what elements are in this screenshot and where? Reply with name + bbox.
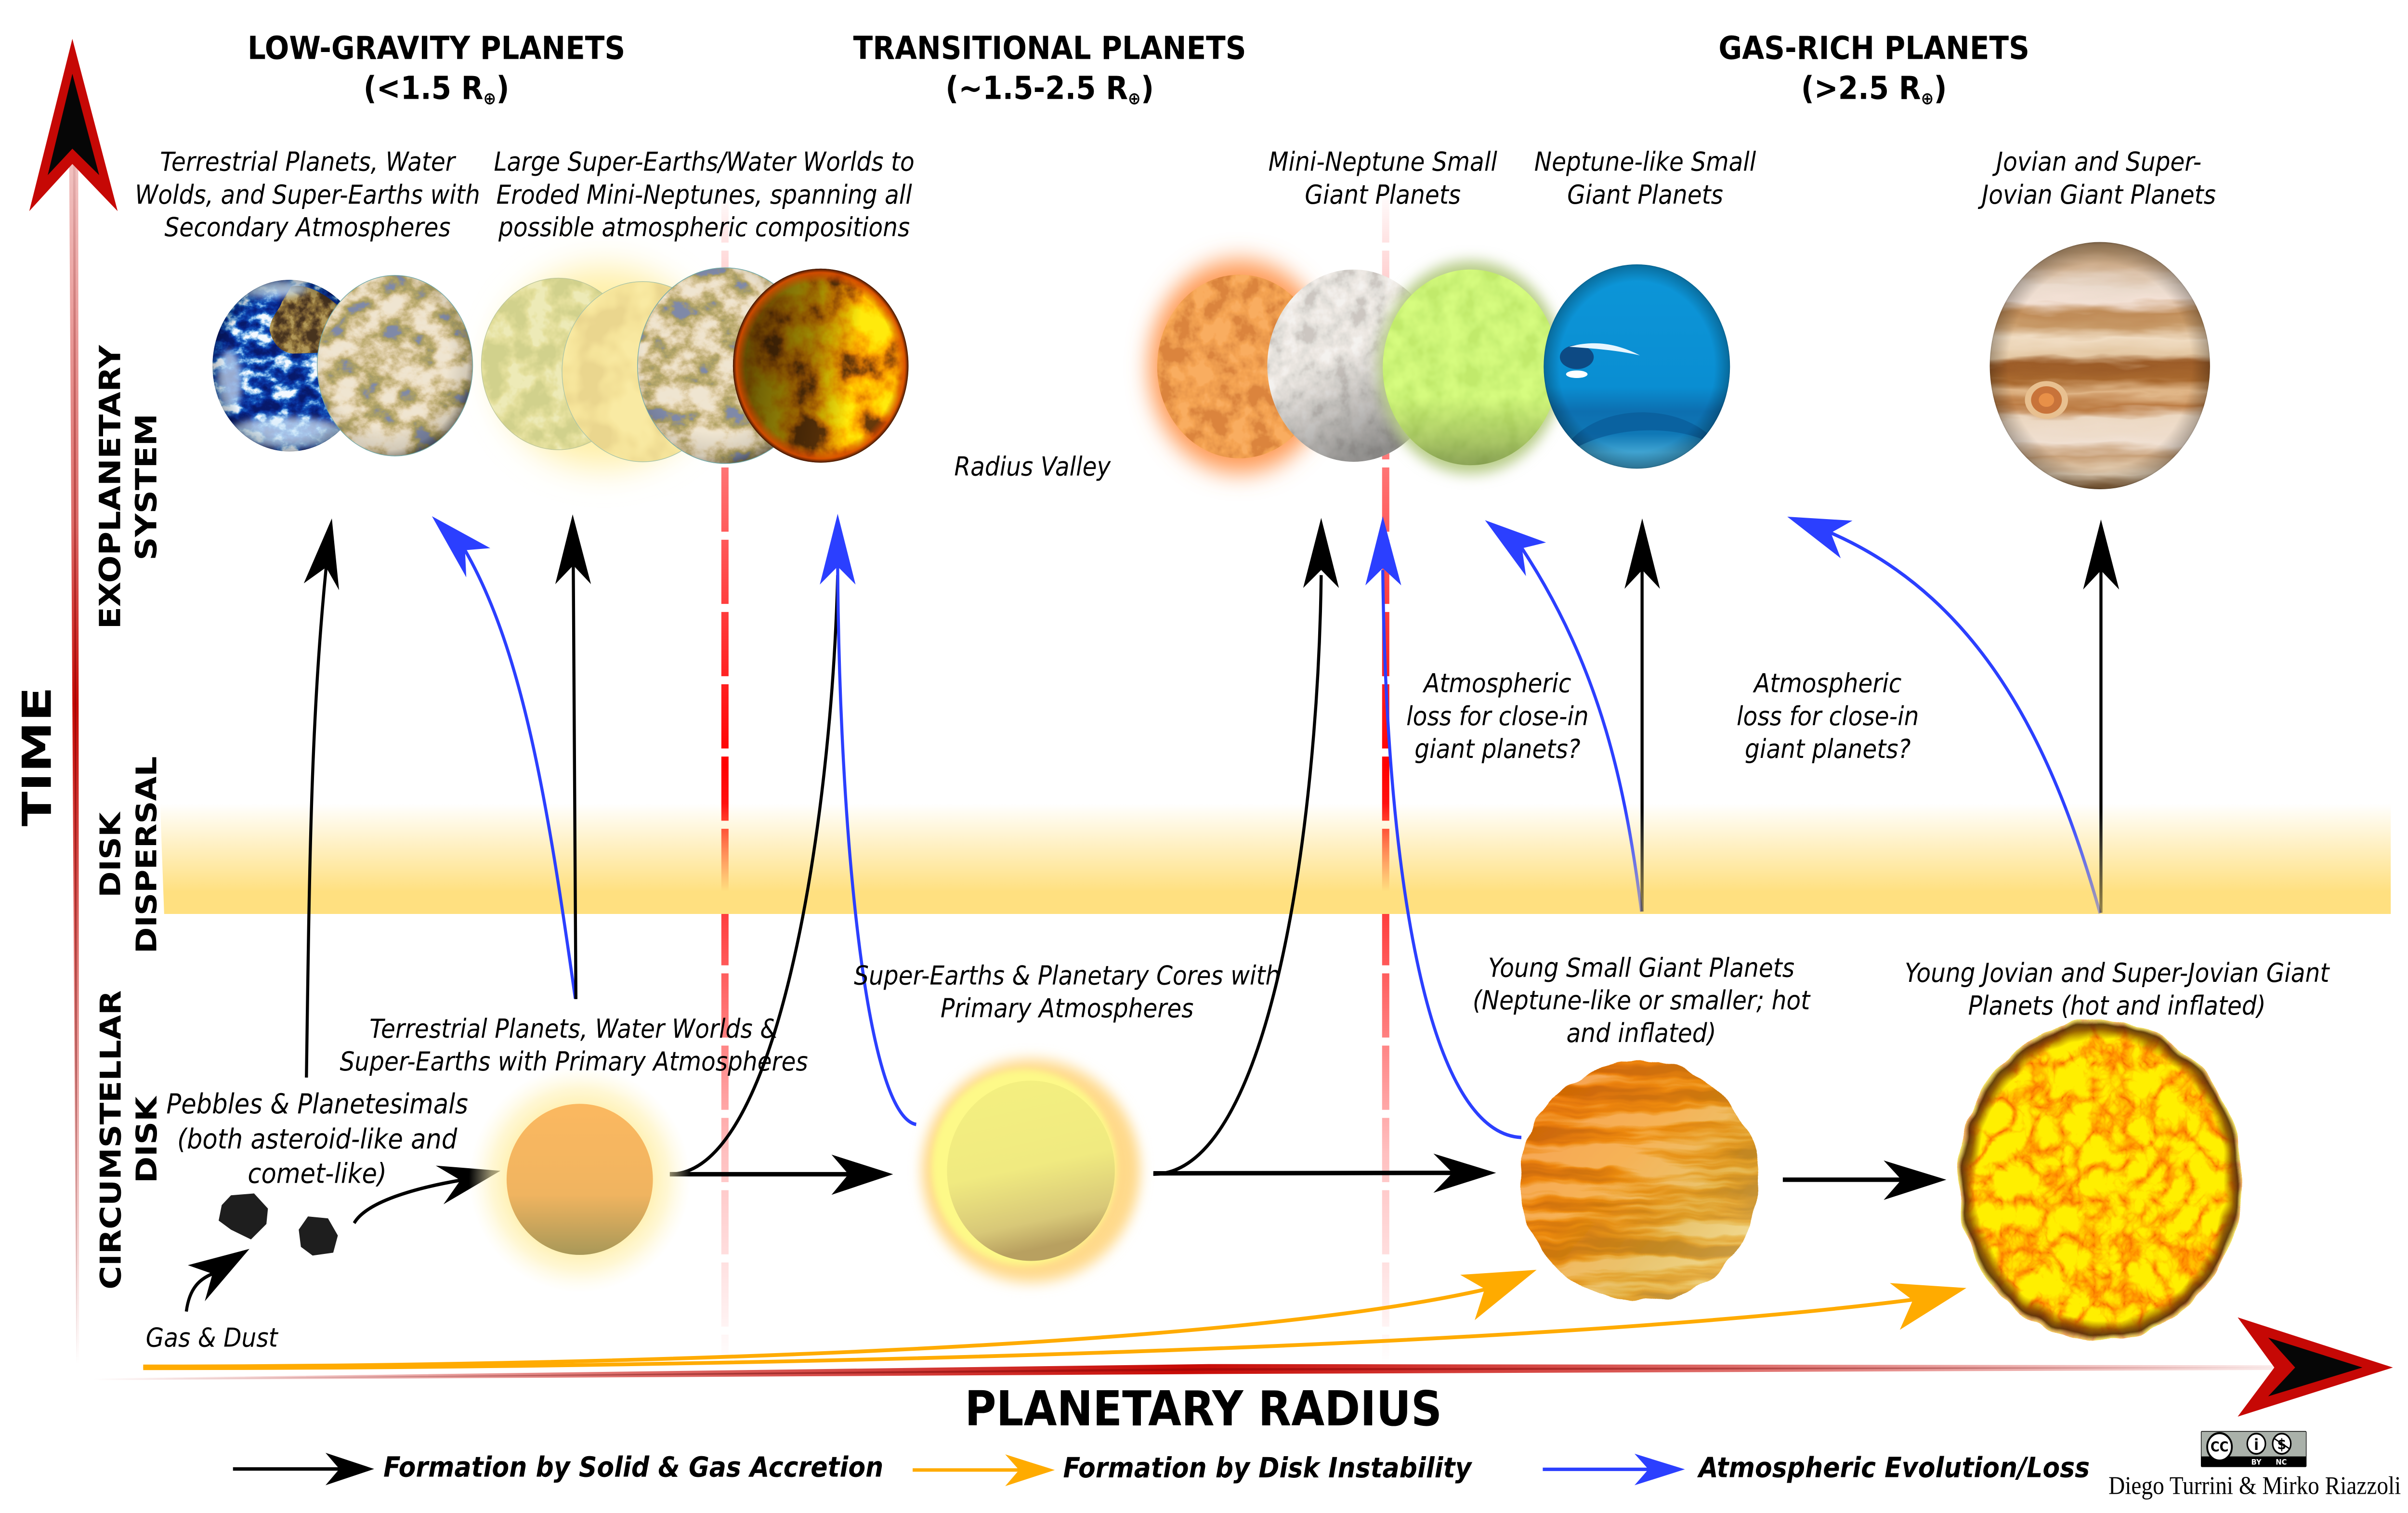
creative commons badge: NC (2276, 1458, 2287, 1467)
caption: atmospheric loss right: loss for close-in (1737, 701, 1919, 732)
legend: atmospheric evolution: Atmospheric Evolution/Loss (1697, 1452, 2090, 1484)
caption: super-earths and cores: Super-Earths & Planetary Cores with (854, 961, 1280, 991)
row label: circumstellar disk: CIRCUMSTELLAR (94, 991, 128, 1290)
heading: gas-rich planets: (>2.5 R (1801, 70, 1947, 108)
glow: small protoplanet (469, 1066, 691, 1292)
arrow: atmospheric loss to neptune-like (1787, 517, 2100, 913)
heading: low-gravity planets: ⊕ (484, 89, 496, 108)
caption: young jovian: Planets (hot and inflated) (1968, 991, 2266, 1021)
planet: earth (212, 280, 340, 452)
planet: green mini-neptune (1383, 270, 1558, 465)
caption: atmospheric loss right: Atmospheric (1754, 668, 1901, 699)
heading: transitional planets: ) (1141, 70, 1154, 106)
heading: low-gravity planets: LOW-GRAVITY PLANETS (248, 30, 625, 66)
time axis arrow (29, 39, 118, 1365)
arrow: atmospheric evolution of super-earths (820, 514, 916, 1124)
planetary radius axis arrow (92, 1317, 2393, 1417)
arrow: young small giant to young jovian (1783, 1161, 1946, 1200)
heading: low-gravity planets: ) (496, 70, 510, 106)
caption: atmospheric loss right: giant planets? (1745, 734, 1911, 765)
pebble: large (219, 1193, 268, 1239)
caption: atmospheric loss left: Atmospheric (1424, 668, 1571, 699)
caption: mini-neptune: Mini-Neptune Small (1269, 147, 1497, 177)
arrow: terrestrial planets upward (555, 514, 591, 999)
caption: super-earths and cores: Primary Atmospheres (941, 993, 1193, 1024)
caption: mini-neptune: Giant Planets (1305, 180, 1461, 210)
caption: young small giants: (Neptune-like or smaller; hot (1473, 986, 1811, 1016)
caption: atmospheric loss left: loss for close-in (1406, 701, 1589, 732)
glow around faded planets (496, 268, 711, 467)
row label: circumstellar disk: DISK (130, 1096, 163, 1183)
caption: large super-earths: Large Super-Earths/Water Worlds to (494, 147, 915, 177)
glow: green mini-neptune (1378, 261, 1563, 474)
caption: large super-earths: Eroded Mini-Neptunes, spanning all (496, 180, 912, 210)
arrow: jovian upward (2083, 520, 2119, 913)
caption: young small giants: and inflated) (1567, 1018, 1716, 1049)
disk instability arrow to young jovian (143, 1283, 1966, 1368)
axis label: planetary radius: PLANETARY RADIUS (965, 1381, 1442, 1437)
creative commons badge: $ (2277, 1436, 2286, 1453)
caption: pebbles and planetesimals: (both asteroid-like and (177, 1123, 458, 1155)
glow: super-earth inner (931, 1070, 1116, 1265)
arrow: evolution of terrestrial planets (432, 516, 576, 999)
planet: faded terrestrial (481, 278, 635, 450)
legend: disk instability: Formation by Disk Instability (1063, 1452, 1472, 1485)
radius valley dashed line, left (724, 178, 726, 1365)
planet: white mini-neptune (1267, 270, 1440, 462)
planet: young jovian (1958, 1020, 2242, 1341)
planet: orange mini-neptune (1157, 274, 1322, 458)
arrow: small planet to super-earth (670, 1155, 893, 1195)
heading: transitional planets: (~1.5-2.5 R (945, 70, 1154, 108)
caption: terrestrial planets: Secondary Atmospheres (164, 212, 451, 243)
heading: low-gravity planets: (<1.5 R (364, 70, 510, 108)
planet: super-earth with primary atmosphere (947, 1081, 1115, 1261)
arrow: planetesimals to low-gravity planets (304, 519, 339, 1078)
planet: small protoplanet (507, 1104, 653, 1255)
arrow: atmospheric loss to mini-neptune (1485, 520, 1641, 912)
arrow: pebbles to small planet (354, 1166, 500, 1223)
caption: neptune-like: Neptune-like Small (1534, 147, 1756, 177)
heading: transitional planets: ⊕ (1128, 89, 1141, 108)
axis label: time: TIME (13, 687, 60, 826)
caption: neptune-like: Giant Planets (1567, 180, 1723, 210)
arrow: atmospheric evolution of young giants (1365, 516, 1521, 1137)
caption: jovian: Jovian Giant Planets (1977, 180, 2216, 210)
caption: young jovian: Young Jovian and Super-Jovian Giant (1905, 958, 2329, 989)
heading: gas-rich planets: ⊕ (1921, 89, 1934, 108)
heading: gas-rich planets: GAS-RICH PLANETS (1718, 30, 2029, 66)
caption: pebbles and planetesimals: Pebbles & Planetesimals (166, 1088, 468, 1120)
attribution: Diego Turrini & Mirko Riazzoli (2108, 1471, 2401, 1500)
row label: disk dispersal: DISK (94, 812, 127, 898)
planet: neptune (1544, 264, 1730, 469)
caption: terrestrial with primary atmospheres: Super-Earths with Primary Atmospheres (340, 1046, 808, 1077)
row label: exoplanetary system: EXOPLANETARY (94, 345, 128, 629)
creative commons badge: CC (2211, 1439, 2228, 1455)
caption: terrestrial planets: Terrestrial Planets, Water (160, 147, 455, 177)
caption: radius valley: Radius Valley (954, 452, 1112, 482)
caption: large super-earths: possible atmospheric compositions (498, 212, 910, 243)
creative commons badge: i (2254, 1436, 2259, 1454)
caption: gas and dust: Gas & Dust (146, 1323, 278, 1353)
heading: gas-rich planets: ) (1934, 70, 1947, 106)
caption: terrestrial with primary atmospheres: Terrestrial Planets, Water Worlds & (369, 1014, 778, 1044)
planet: large rocky super-earth (638, 268, 813, 464)
legend: solid and gas accretion: Formation by Solid & Gas Accretion (383, 1451, 883, 1484)
planet: faded water world (562, 282, 724, 462)
heading: transitional planets: TRANSITIONAL PLANETS (853, 30, 1246, 66)
creative commons badge: BY (2251, 1458, 2262, 1467)
arrow: super-earth to young small giant (1153, 1154, 1496, 1193)
planet: jupiter (1990, 242, 2210, 489)
planet: rocky super-earth (317, 275, 473, 456)
legend: atmospheric evolution (1543, 1452, 2090, 1485)
disk instability arrow to young small giant (143, 1270, 1537, 1367)
pebble: small (299, 1216, 338, 1255)
row label: disk dispersal: DISPERSAL (130, 756, 163, 953)
row label: exoplanetary system: SYSTEM (130, 414, 164, 561)
glow: orange mini-neptune (1149, 260, 1331, 473)
caption: atmospheric loss left: giant planets? (1414, 734, 1581, 765)
legend: disk instability (913, 1452, 1472, 1486)
arrow: gas and dust to pebbles (186, 1249, 249, 1312)
caption: pebbles and planetesimals: comet-like) (248, 1158, 387, 1189)
caption: young small giants: Young Small Giant Planets (1488, 953, 1794, 983)
planet: young small giant (1521, 1061, 1758, 1301)
caption: jovian: Jovian and Super- (1996, 147, 2201, 177)
arrow: accretion from small planet to large super-earths (670, 575, 838, 1174)
arrow: accretion to mini-neptunes (1153, 518, 1339, 1174)
disk dispersal band (160, 803, 2391, 914)
glow: super-earth envelope (922, 1059, 1140, 1282)
planet: lava world (733, 269, 908, 463)
caption: terrestrial planets: Wolds, and Super-Earths with (135, 180, 480, 210)
radius valley dashed line, right (1385, 178, 1387, 1365)
arrow: neptune-like upward (1624, 519, 1660, 912)
creative commons badge (2201, 1431, 2306, 1467)
